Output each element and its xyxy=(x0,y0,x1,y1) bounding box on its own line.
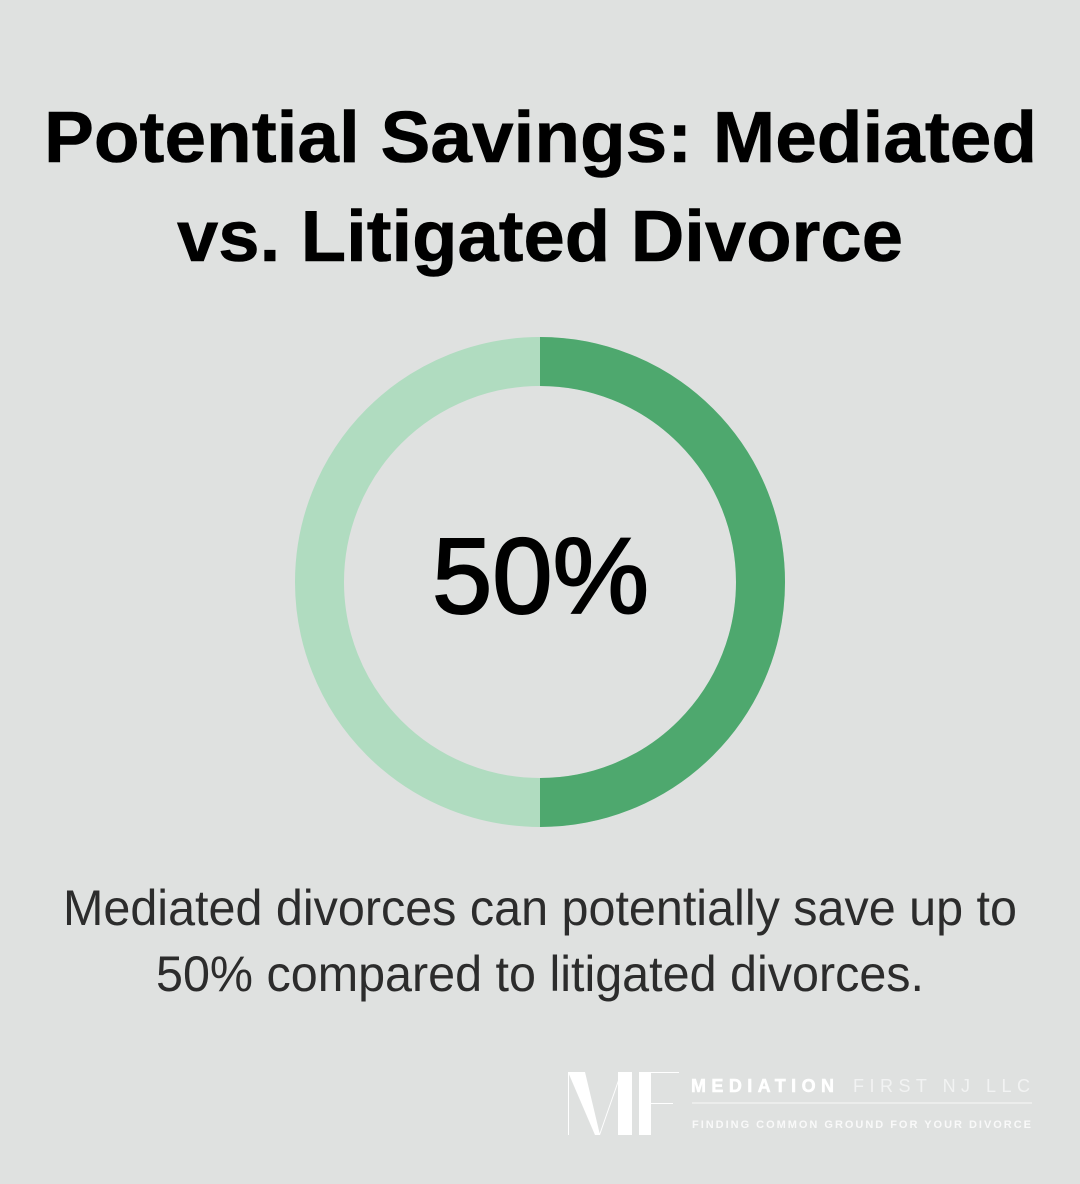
logo: Mediation First NJ LLC xyxy=(568,1072,1032,1135)
logo tagline: FINDING COMMON GROUND FOR YOUR DIVORCE xyxy=(692,1119,1031,1131)
title: Potential Savings: Mediated xyxy=(44,98,1037,178)
logo name xyxy=(691,1076,1030,1096)
title: vs. Litigated Divorce xyxy=(177,197,903,277)
logo name: MEDIATION xyxy=(691,1076,834,1096)
logo mark: MF xyxy=(568,1072,679,1135)
donut chart: 50% xyxy=(320,362,760,802)
donut value: 50% xyxy=(432,515,649,636)
title xyxy=(44,98,1037,277)
logo name: FIRST NJ LLC xyxy=(853,1076,1030,1096)
description: Mediated divorces can potentially save up to xyxy=(63,880,1017,936)
description: 50% compared to litigated divorces. xyxy=(156,946,924,1002)
description xyxy=(63,880,1017,1002)
